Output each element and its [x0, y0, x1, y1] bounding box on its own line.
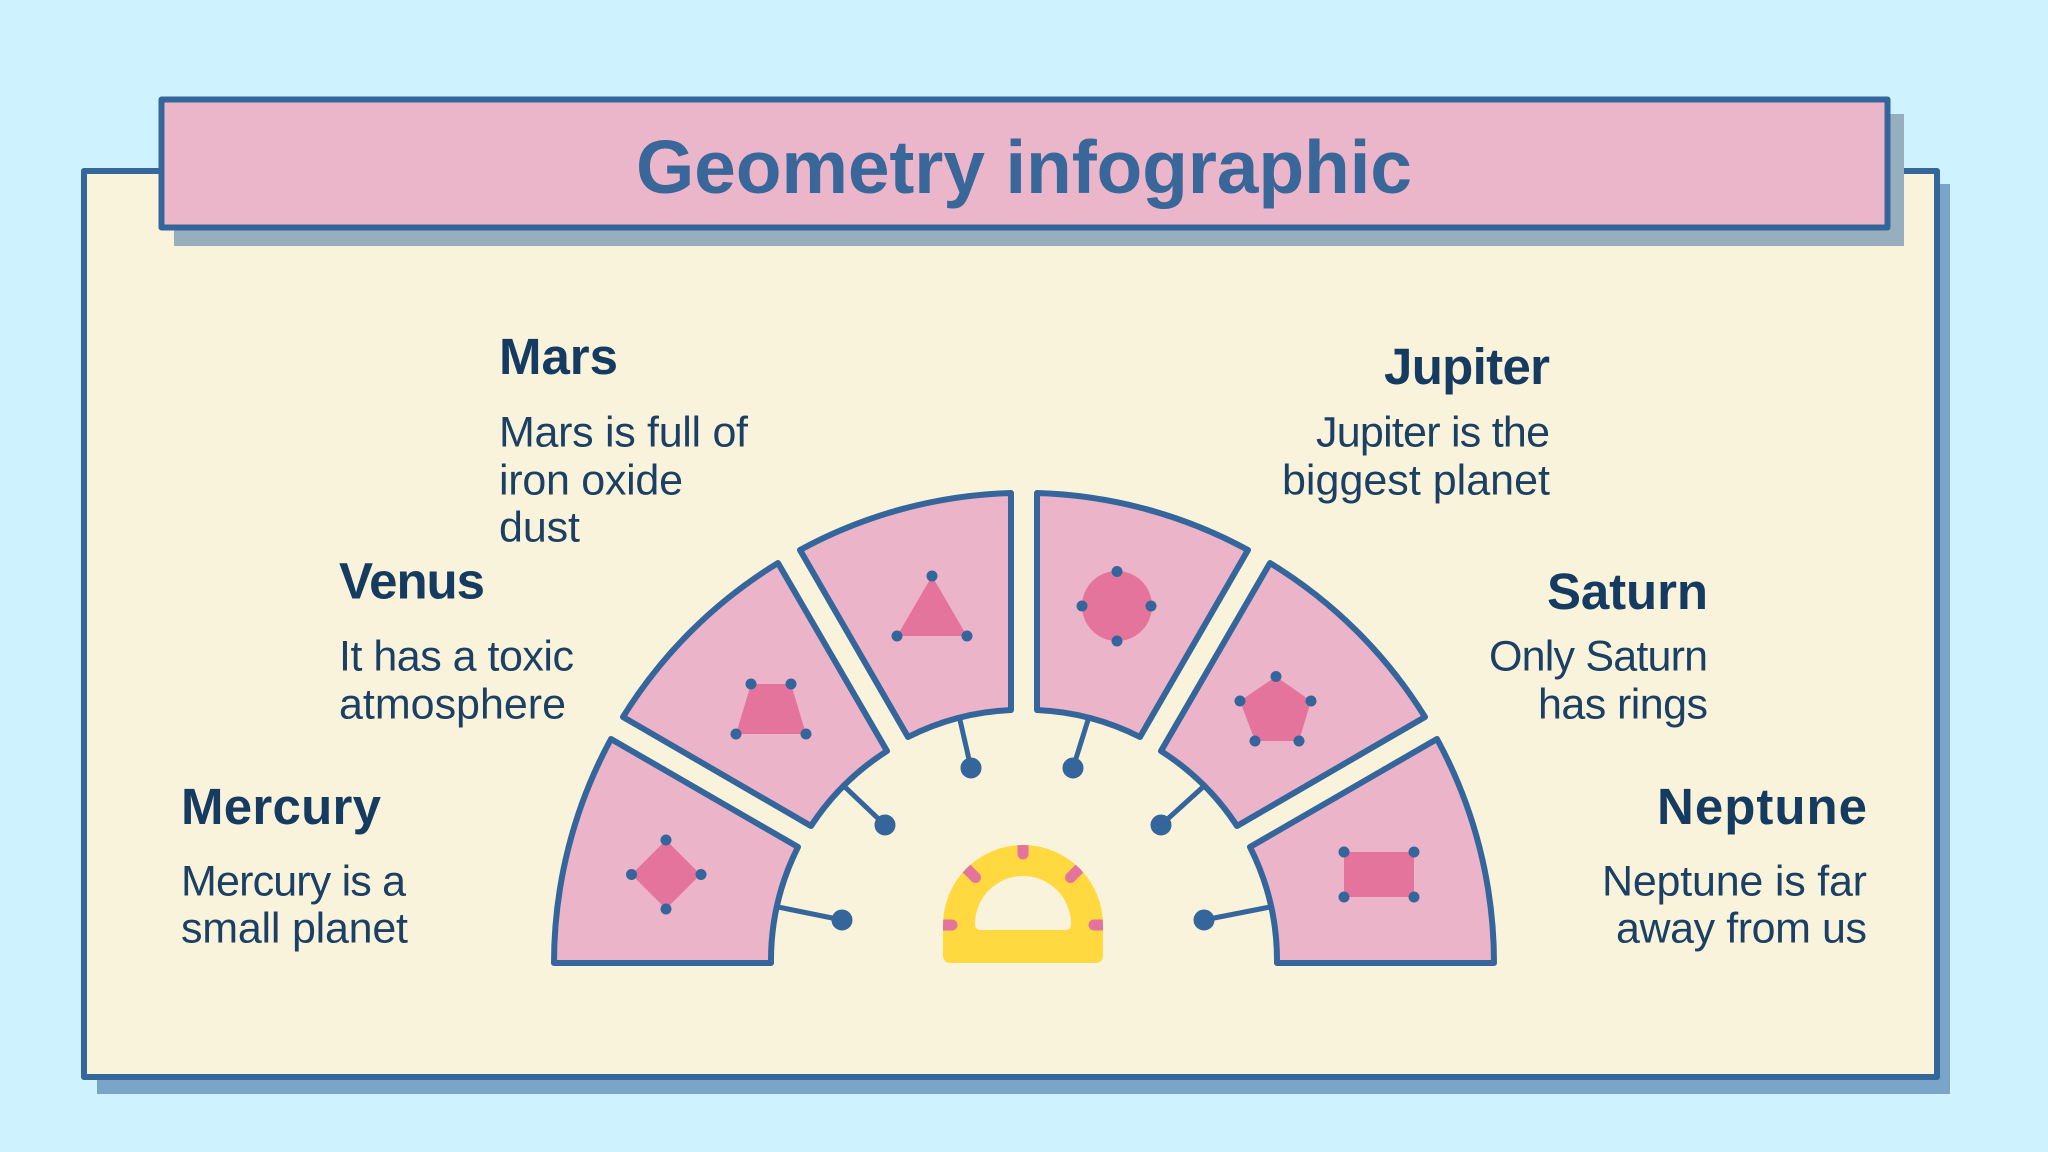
- text block: Saturn: has rings: [1538, 680, 1708, 728]
- text block: Mars: Mars: [499, 328, 618, 385]
- sector: Neptune: [1194, 739, 1494, 963]
- sector: Saturn: [1151, 563, 1425, 835]
- icon: protractor: [943, 845, 1103, 963]
- text block: Neptune: [1602, 778, 1867, 952]
- text block: Venus: [339, 552, 574, 728]
- icon: pentagon: [1234, 671, 1316, 746]
- text block: Mars: dust: [499, 504, 580, 552]
- text block: Venus: Venus: [339, 552, 485, 610]
- text block: Neptune: Neptune: [1657, 778, 1867, 835]
- text block: Mercury: Mercury is a: [181, 858, 406, 906]
- icon: rectangle: [1338, 846, 1420, 902]
- text block: Saturn: [1489, 563, 1708, 728]
- text block: Jupiter: Jupiter: [1384, 338, 1550, 395]
- icon: circle: [1076, 566, 1156, 646]
- icon: trapezoid: [730, 678, 812, 740]
- text block: Mars: iron oxide: [499, 456, 683, 504]
- title banner: [162, 100, 1904, 246]
- sector: Mercury: [554, 739, 852, 963]
- text block: Saturn: Saturn: [1547, 563, 1708, 620]
- text block: Mercury: [181, 778, 408, 952]
- text block: Mercury: Mercury: [181, 778, 382, 835]
- text block: Mercury: small planet: [181, 904, 408, 952]
- text block: Venus: atmosphere: [339, 680, 566, 728]
- text block: Mars: Mars is full of: [499, 408, 749, 456]
- text block: Jupiter: [1282, 338, 1550, 504]
- icon: triangle: [892, 570, 972, 642]
- text block: Mars: [499, 328, 749, 552]
- text block: Neptune: away from us: [1616, 904, 1867, 952]
- text block: Neptune: Neptune is far: [1602, 858, 1867, 906]
- text block: Jupiter: Jupiter is the: [1316, 408, 1550, 456]
- sector: Jupiter: [1037, 493, 1248, 778]
- icon: diamond: [626, 834, 706, 914]
- title: Geometry infographic: [636, 125, 1412, 209]
- text block: Venus: It has a toxic: [339, 632, 574, 680]
- sector: Venus: [623, 563, 895, 835]
- panel: main card: [84, 171, 1950, 1094]
- text block: Jupiter: biggest planet: [1282, 456, 1550, 504]
- text block: Saturn: Only Saturn: [1489, 632, 1708, 680]
- sector: Mars: [800, 493, 1011, 778]
